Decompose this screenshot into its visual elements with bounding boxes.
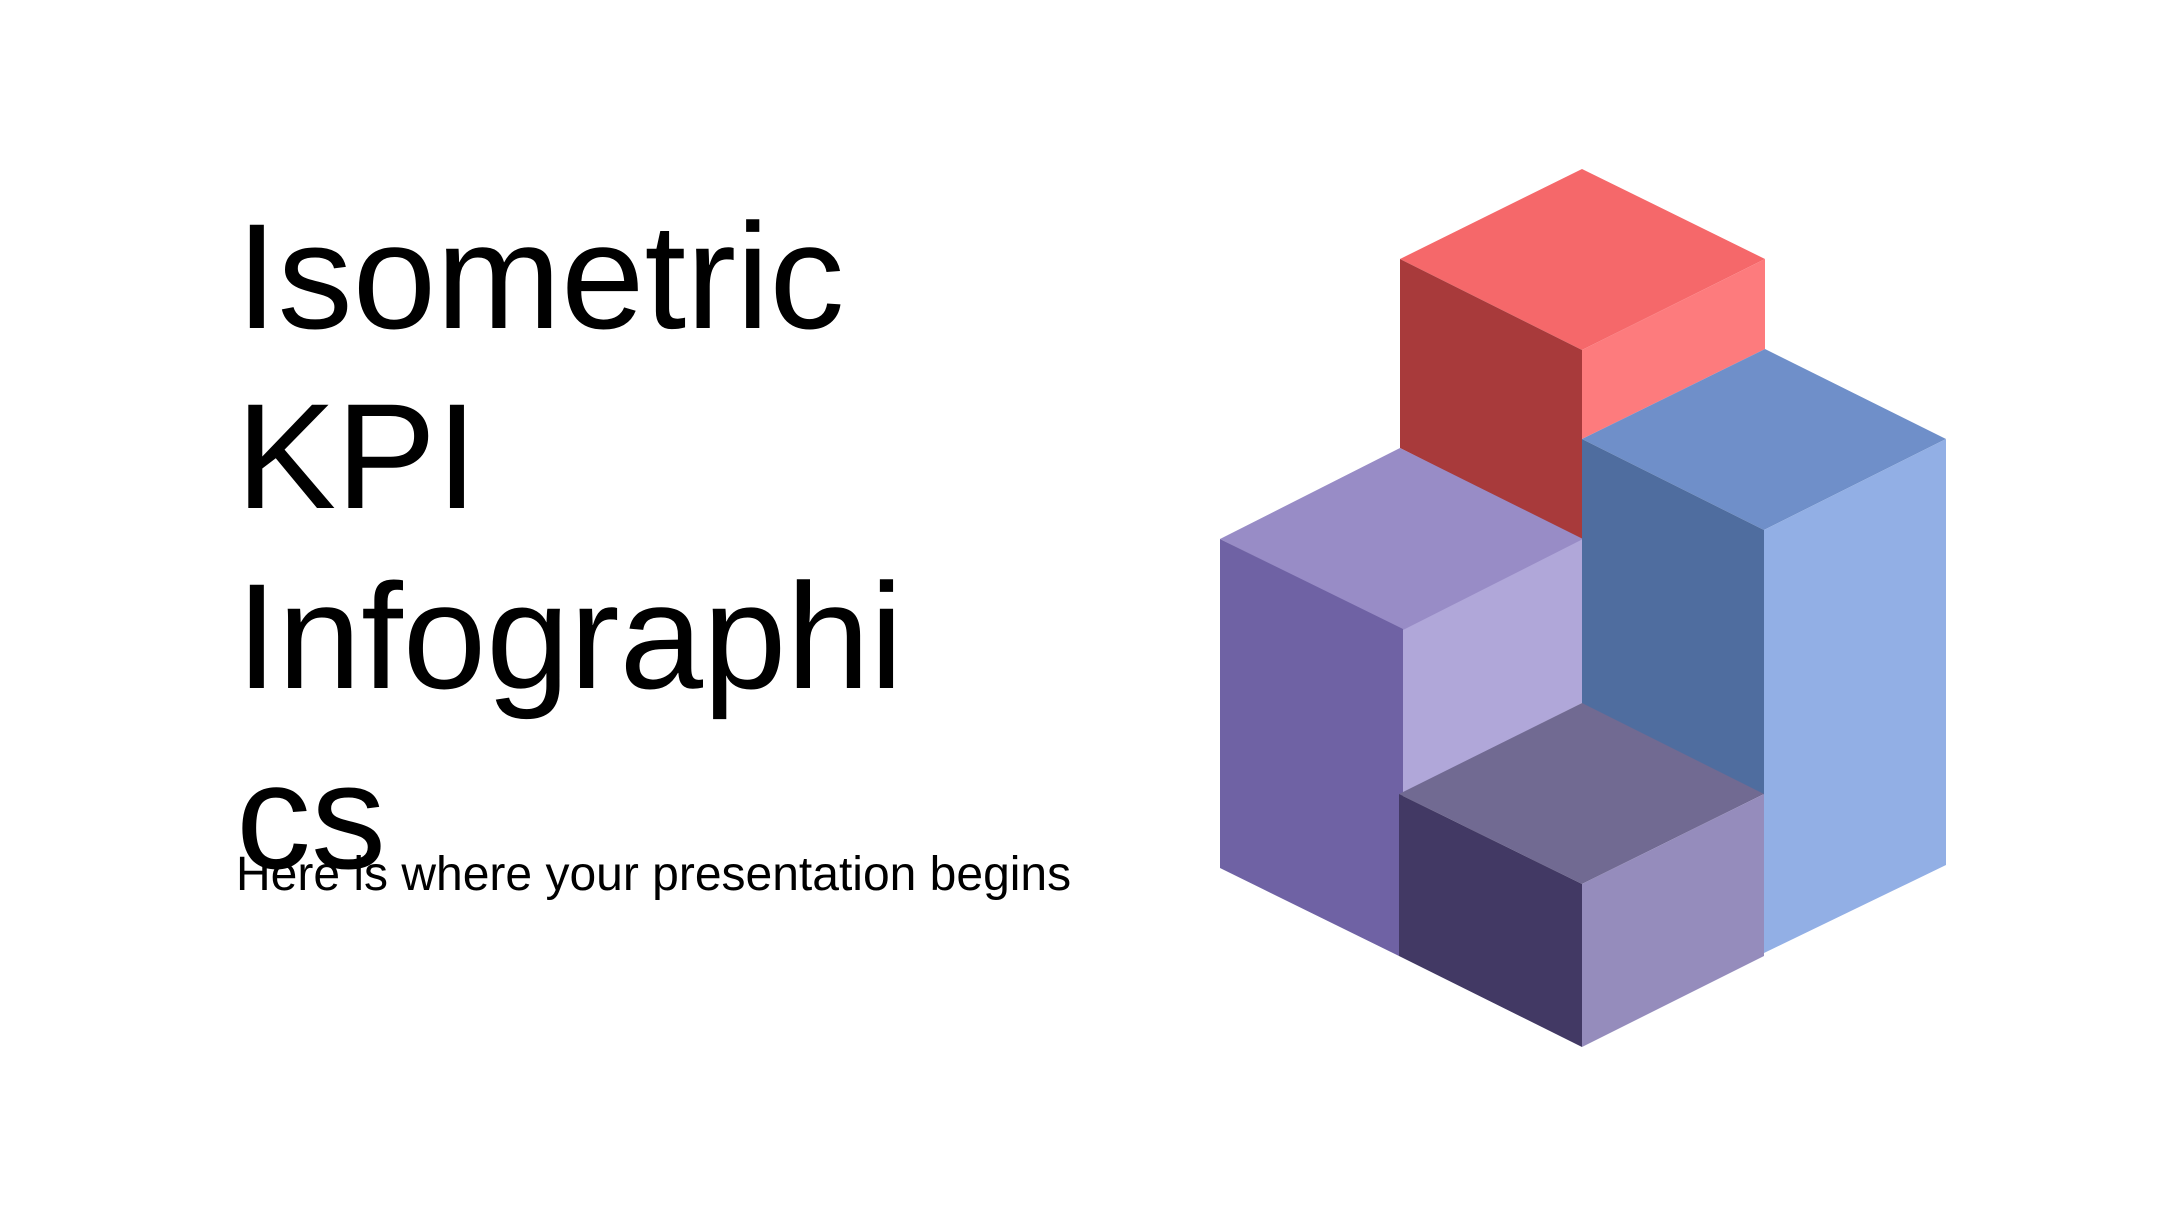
title: cs: [236, 732, 386, 900]
red block: [1400, 169, 1765, 540]
purple block: [1220, 448, 1583, 956]
title: [236, 192, 903, 900]
title: Infographi: [236, 552, 903, 720]
title: Isometric: [236, 192, 844, 360]
title: KPI: [236, 372, 478, 540]
dark block: [1399, 703, 1764, 1047]
blue block: [1582, 349, 1946, 953]
subtitle: Here is where your presentation begins: [236, 848, 1071, 901]
